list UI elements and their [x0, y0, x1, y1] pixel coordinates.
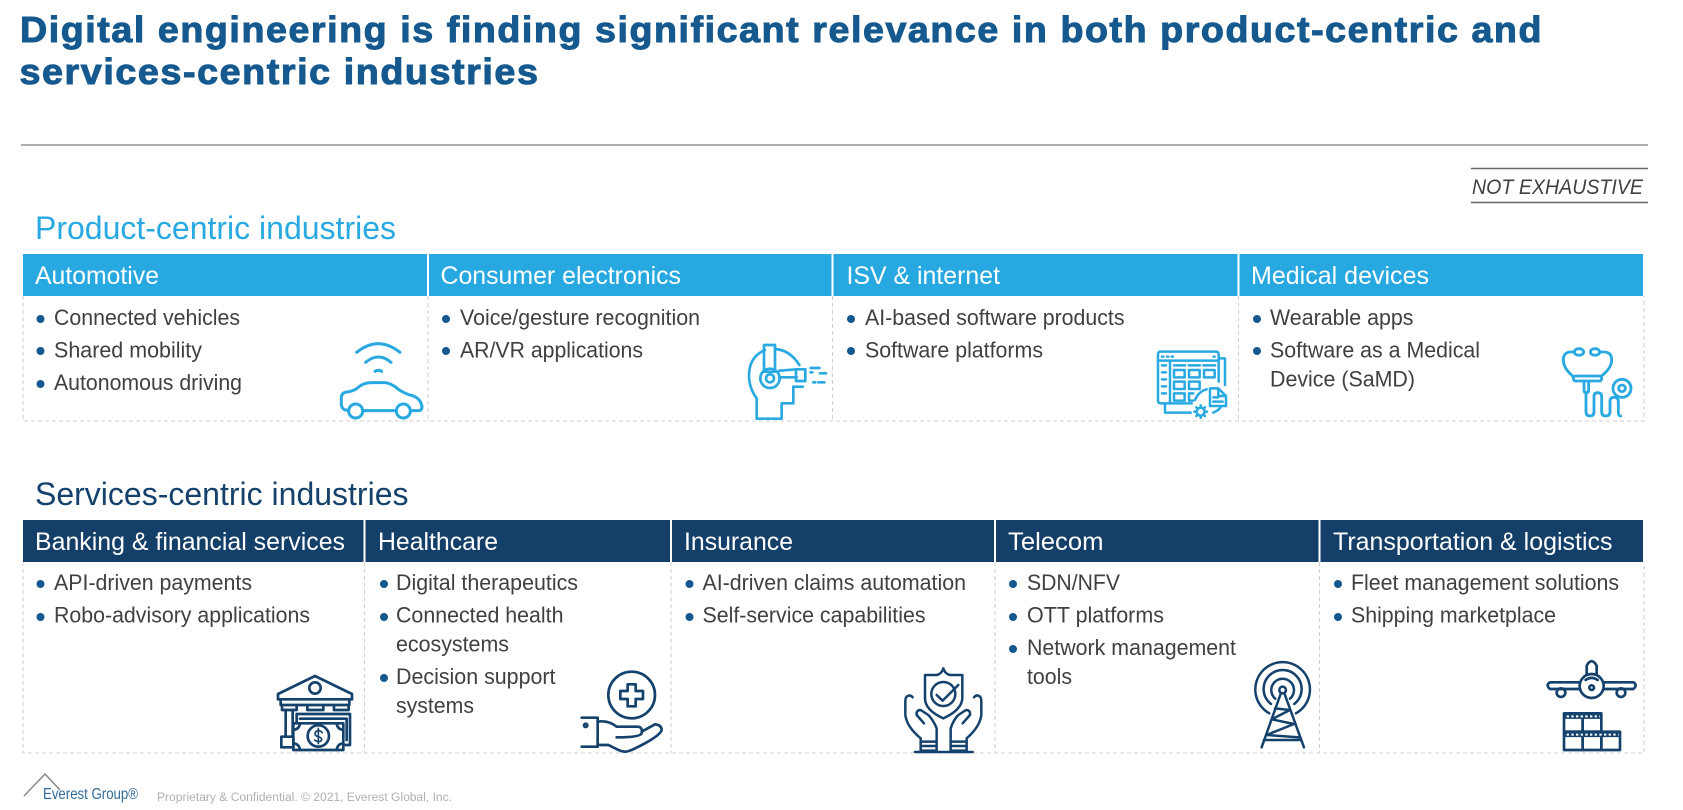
column: banking and financial services: [35, 528, 352, 750]
column: consumer electronics: [440, 262, 826, 419]
column: telecom: Telecom: [1008, 528, 1104, 556]
callout: not exhaustive: NOT EXHAUSTIVE: [1472, 176, 1644, 199]
column: automotive: Automotive: [35, 262, 159, 290]
column: insurance: Insurance: [684, 528, 793, 556]
column: healthcare: [378, 528, 662, 752]
column: ISV and internet: Software platforms: [865, 338, 1043, 362]
icon: shield in hands: [905, 668, 981, 752]
column: consumer electronics: AR/VR applications: [460, 338, 643, 362]
column: healthcare: systems: [396, 693, 474, 718]
column: medical devices: Device (SaMD): [1270, 366, 1415, 392]
column: automotive: [35, 262, 422, 418]
column: consumer electronics: Consumer electronics: [440, 262, 681, 290]
column: telecom: SDN/NFV: [1027, 570, 1120, 595]
column: telecom: tools: [1027, 664, 1072, 689]
column: healthcare: Decision support: [396, 664, 556, 689]
icon: hand with medical cross: [582, 672, 662, 752]
column: medical devices: Wearable apps: [1270, 305, 1414, 330]
icon: stethoscope: [1563, 349, 1631, 416]
column: banking and financial services: API-driven payments: [54, 570, 252, 595]
column: insurance: [684, 528, 981, 752]
column: automotive: Connected vehicles: [54, 305, 240, 330]
heading: services-centric industries: Services-centric industries: [35, 476, 408, 512]
column: healthcare: Healthcare: [378, 528, 498, 556]
column: telecom: OTT platforms: [1027, 602, 1164, 628]
logo: Everest Group: Everest Group®: [43, 786, 138, 803]
column: healthcare: Digital therapeutics: [396, 570, 578, 595]
column: medical devices: [1251, 262, 1631, 416]
column: ISV and internet: ISV & internet: [846, 262, 1000, 290]
logo: Everest Group: [24, 774, 138, 803]
column: insurance: AI-driven claims automation: [702, 570, 966, 595]
title: [20, 9, 1543, 92]
icon: connected car: [341, 344, 422, 418]
column: automotive: Shared mobility: [54, 338, 202, 362]
title: services-centric industries: [20, 51, 540, 92]
column: telecom: Network management: [1027, 635, 1236, 660]
column: ISV and internet: AI-based software products: [865, 305, 1124, 330]
column: consumer electronics: Voice/gesture recognition: [460, 305, 700, 330]
icon: plane and cargo boxes: [1548, 661, 1636, 750]
panel: product-centric table: [23, 254, 1644, 421]
column: banking and financial services: Robo-advisory applications: [54, 602, 310, 628]
column: telecom: [1008, 528, 1310, 747]
panel: services-centric table: [23, 520, 1644, 753]
footer text: Proprietary & Confidential. © 2021, Everest Global, Inc.: [157, 792, 452, 804]
column: transportation and logistics: [1333, 528, 1636, 750]
column: transportation and logistics: Fleet management solutions: [1351, 570, 1619, 595]
column: insurance: Self-service capabilities: [702, 602, 926, 628]
column: banking and financial services: Banking & financial services: [35, 528, 345, 556]
icon: radio tower: [1255, 662, 1310, 747]
title: Digital engineering is finding significant relevance in both product-centric and: [20, 9, 1543, 50]
icon: VR headset head: [749, 345, 826, 419]
column: healthcare: ecosystems: [396, 632, 509, 656]
icon: bank and money: [278, 676, 352, 750]
column: ISV and internet: [846, 262, 1226, 418]
heading: product-centric industries: Product-centric industries: [35, 210, 396, 246]
column: transportation and logistics: Shipping marketplace: [1351, 602, 1556, 628]
column: healthcare: Connected health: [396, 602, 564, 628]
column: medical devices: Software as a Medical: [1270, 338, 1480, 362]
column: medical devices: Medical devices: [1251, 262, 1429, 290]
icon: software dashboard: [1158, 352, 1226, 418]
column: transportation and logistics: Transportation & logistics: [1333, 528, 1612, 556]
column: automotive: Autonomous driving: [54, 370, 242, 395]
